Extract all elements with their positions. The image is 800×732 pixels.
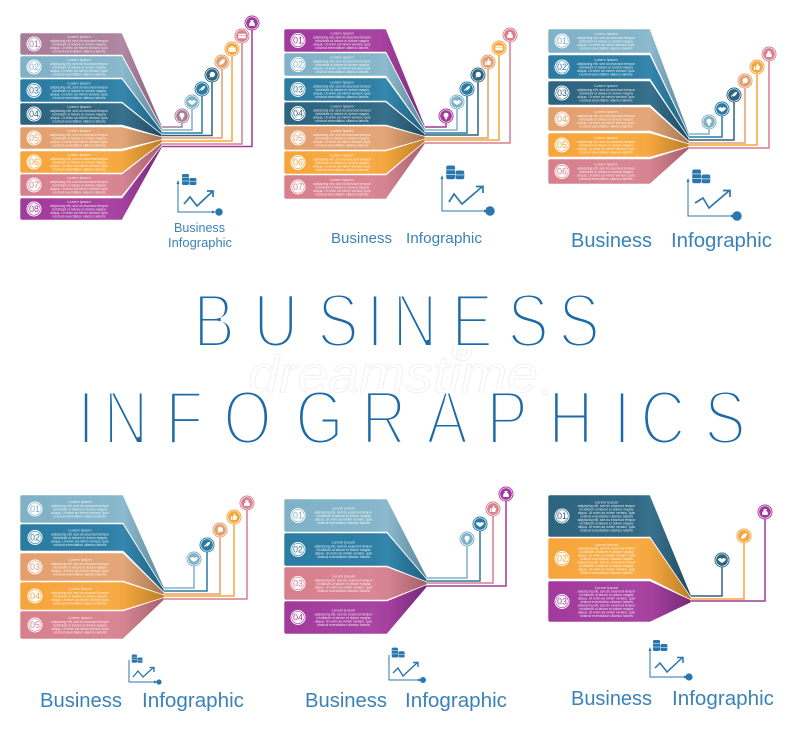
panel: infographic with 3 options	[548, 495, 774, 710]
caption: Business	[331, 230, 392, 247]
connector lines	[162, 23, 252, 146]
row 03: 03	[557, 596, 567, 606]
row 02	[20, 524, 164, 592]
row 05: incididunt ut labore et dolore magna	[52, 136, 106, 140]
row 03: adipiscing elit, sed do eiusmod tempor	[577, 88, 636, 92]
panel: infographic with 7 options	[284, 28, 518, 247]
connector lines	[689, 54, 769, 148]
row 05: aliqua. Ut enim ad minim veniam, quis	[577, 147, 635, 151]
row 04	[548, 107, 689, 144]
row 05: 05	[293, 133, 303, 143]
panel: infographic with 8 options	[20, 16, 260, 250]
row 05: nostrud exercitation ullamco laboris	[53, 630, 107, 634]
row 03: Lorem Ipsum	[594, 83, 618, 88]
row 06: aliqua. Ut enim ad minim veniam, quis	[50, 164, 108, 168]
row 05: Lorem Ipsum	[594, 135, 618, 140]
row 01: incididunt ut labore et dolore magna	[52, 42, 106, 46]
row 01: nostrud exercitation ullamco laboris	[315, 46, 369, 50]
row 01: nostrud exercitation ullamco laboris	[580, 514, 633, 518]
row 02: 02	[557, 554, 567, 564]
step icons	[714, 504, 772, 568]
row 04: adipiscing elit, sed do eiusmod tempor	[50, 109, 109, 113]
row 03: aliqua. Ut enim ad minim veniam, quis	[578, 610, 635, 614]
row 03: incididunt ut labore et dolore magna	[317, 582, 371, 586]
row 01	[20, 33, 162, 128]
row 03	[20, 79, 162, 134]
row 03: adipiscing elit, sed do eiusmod tempor	[313, 84, 372, 88]
caption: Business	[174, 220, 225, 235]
row 02: 02	[293, 60, 303, 70]
row 04: Lorem Ipsum	[330, 104, 354, 108]
chart icon	[686, 170, 742, 221]
row 01: Lorem Ipsum	[67, 34, 91, 39]
row 02: 02	[557, 62, 567, 72]
row 06: adipiscing elit, sed do eiusmod tempor	[577, 166, 636, 170]
chart icon	[440, 166, 495, 216]
row 01: nostrud exercitation ullamco laboris	[53, 514, 107, 518]
row 01: nostrud exercitation ullamco laboris	[317, 521, 370, 525]
row 04: nostrud exercitation ullamco laboris	[53, 602, 107, 606]
row 04: 04	[293, 108, 303, 118]
row 06: nostrud exercitation ullamco laboris	[579, 177, 633, 181]
row 02	[548, 538, 691, 600]
row 01: nostrud exercitation ullamco laboris	[52, 50, 106, 54]
row 03: nostrud exercitation ullamco laboris	[52, 96, 106, 100]
row 03: nostrud exercitation ullamco laboris	[315, 95, 369, 99]
row 03: 03	[293, 578, 303, 588]
row 03: aliqua. Ut enim ad minim veniam, quis	[313, 92, 371, 96]
row 01: 01	[293, 36, 303, 46]
row 01: 01	[293, 510, 303, 520]
row 02: aliqua. Ut enim ad minim veniam, quis	[50, 69, 108, 73]
row 03: nostrud exercitation ullamco laboris	[580, 600, 633, 604]
connector lines	[425, 35, 510, 143]
row 02: adipiscing elit, sed do eiusmod tempor	[578, 560, 636, 564]
row 04: aliqua. Ut enim ad minim veniam, quis	[315, 620, 372, 624]
row 05	[20, 598, 164, 639]
row 02: adipiscing elit, sed do eiusmod tempor	[50, 62, 109, 66]
row 04: adipiscing elit, sed do eiusmod tempor	[51, 591, 110, 595]
row 03: aliqua. Ut enim ad minim veniam, quis	[315, 586, 372, 590]
row 03: Lorem Ipsum	[330, 80, 354, 84]
row 01: aliqua. Ut enim ad minim veniam, quis	[51, 511, 109, 515]
row 07: incididunt ut labore et dolore magna	[315, 186, 369, 190]
caption: Business	[40, 690, 122, 712]
caption: Infographic	[168, 235, 232, 250]
row 07: 07	[29, 180, 39, 190]
row 01: nostrud exercitation ullamco laboris	[580, 528, 633, 532]
row 03: aliqua. Ut enim ad minim veniam, quis	[578, 596, 635, 600]
row 01: adipiscing elit, sed do eiusmod tempor	[577, 36, 636, 40]
row 05	[20, 127, 162, 149]
row 03: adipiscing elit, sed do eiusmod tempor	[315, 578, 373, 582]
row 05: adipiscing elit, sed do eiusmod tempor	[51, 620, 110, 624]
row 07: Lorem Ipsum	[330, 177, 354, 182]
row 02: incididunt ut labore et dolore magna	[315, 63, 369, 67]
row 02	[284, 533, 427, 582]
caption	[331, 230, 483, 247]
caption	[40, 690, 244, 712]
row 03: incididunt ut labore et dolore magna	[580, 593, 634, 597]
row 07: 07	[293, 182, 303, 192]
row 05: incididunt ut labore et dolore magna	[579, 144, 633, 148]
row 01: aliqua. Ut enim ad minim veniam, quis	[577, 43, 635, 47]
row 02: adipiscing elit, sed do eiusmod tempor	[578, 546, 636, 550]
row 04: Lorem Ipsum	[68, 586, 92, 591]
row 04: incididunt ut labore et dolore magna	[579, 118, 633, 122]
connector lines	[164, 503, 247, 599]
row 01: Lorem Ipsum	[595, 500, 619, 504]
row 06: Lorem Ipsum	[330, 152, 354, 158]
row 05: adipiscing elit, sed do eiusmod tempor	[577, 140, 636, 144]
row 03: nostrud exercitation ullamco laboris	[53, 572, 107, 576]
row 06	[548, 146, 689, 184]
row 05: Lorem Ipsum	[67, 128, 91, 133]
row 01	[20, 495, 164, 590]
row 04: incididunt ut labore et dolore magna	[53, 594, 107, 598]
row 03: incididunt ut labore et dolore magna	[52, 89, 106, 93]
row 01: aliqua. Ut enim ad minim veniam, quis	[313, 42, 371, 46]
row 03: nostrud exercitation ullamco laboris	[580, 614, 633, 618]
row 04	[284, 102, 425, 136]
row 02: Lorem Ipsum	[595, 542, 619, 547]
row 01: adipiscing elit, sed do eiusmod tempor	[51, 504, 110, 508]
row 03: adipiscing elit, sed do eiusmod tempor	[578, 590, 636, 594]
row 06: incididunt ut labore et dolore magna	[315, 161, 369, 165]
row 05: nostrud exercitation ullamco laboris	[315, 144, 369, 148]
title	[77, 278, 746, 460]
row 05: nostrud exercitation ullamco laboris	[579, 150, 633, 154]
row 07	[20, 142, 162, 196]
row 03: Lorem Ipsum	[67, 80, 91, 86]
row 01: incididunt ut labore et dolore magna	[317, 514, 371, 518]
row 02: aliqua. Ut enim ad minim veniam, quis	[577, 69, 635, 73]
row 04: adipiscing elit, sed do eiusmod tempor	[577, 114, 636, 118]
row 02: incididunt ut labore et dolore magna	[52, 66, 106, 70]
row 04: 04	[29, 109, 39, 119]
row 04: Lorem Ipsum	[594, 109, 618, 114]
row 03: 03	[30, 562, 40, 572]
row 01: incididunt ut labore et dolore magna	[315, 39, 369, 43]
row 02: Lorem Ipsum	[330, 54, 354, 60]
row 04	[20, 582, 164, 610]
row 05: 05	[29, 133, 39, 143]
watermark: dreamstime	[248, 346, 538, 404]
row 01: Lorem Ipsum	[330, 30, 354, 36]
panel: infographic with 5 options	[20, 495, 254, 712]
row 02: adipiscing elit, sed do eiusmod tempor	[51, 532, 110, 536]
caption	[571, 230, 772, 252]
row 02: incididunt ut labore et dolore magna	[317, 548, 371, 552]
chart icon	[176, 174, 223, 216]
row 02: adipiscing elit, sed do eiusmod tempor	[315, 544, 373, 548]
row 06	[20, 140, 162, 173]
row 03: aliqua. Ut enim ad minim veniam, quis	[577, 95, 635, 99]
row 06: 06	[557, 166, 567, 176]
row 01: incididunt ut labore et dolore magna	[580, 508, 634, 512]
row 03: incididunt ut labore et dolore magna	[580, 607, 634, 611]
row 06: nostrud exercitation ullamco laboris	[315, 168, 369, 172]
row 02: Lorem Ipsum	[67, 57, 91, 62]
row 04: adipiscing elit, sed do eiusmod tempor	[313, 108, 372, 112]
caption: Business	[571, 230, 652, 252]
row 02: nostrud exercitation ullamco laboris	[315, 70, 369, 74]
caption: Infographic	[142, 690, 244, 712]
row 03: nostrud exercitation ullamco laboris	[579, 98, 633, 102]
chart icon	[648, 640, 693, 681]
row 01: adipiscing elit, sed do eiusmod tempor	[578, 504, 636, 508]
row 04: aliqua. Ut enim ad minim veniam, quis	[50, 116, 108, 120]
row 03: Lorem Ipsum	[595, 585, 619, 590]
row 04: nostrud exercitation ullamco laboris	[52, 120, 106, 124]
title line: BUSINESS: BUSINESS	[193, 278, 600, 363]
row 02: nostrud exercitation ullamco laboris	[52, 72, 106, 76]
row 04: nostrud exercitation ullamco laboris	[579, 124, 633, 128]
row 05: aliqua. Ut enim ad minim veniam, quis	[51, 627, 109, 631]
row 06: 06	[293, 158, 303, 168]
row 03: adipiscing elit, sed do eiusmod tempor	[50, 86, 109, 90]
row 08: nostrud exercitation ullamco laboris	[52, 214, 106, 218]
row 01: adipiscing elit, sed do eiusmod tempor	[50, 39, 109, 43]
row 08: adipiscing elit, sed do eiusmod tempor	[50, 204, 109, 208]
row 05: adipiscing elit, sed do eiusmod tempor	[313, 133, 372, 137]
row 03: adipiscing elit, sed do eiusmod tempor	[578, 604, 636, 608]
row 04: aliqua. Ut enim ad minim veniam, quis	[313, 116, 371, 120]
row 05: incididunt ut labore et dolore magna	[315, 136, 369, 140]
row 01: adipiscing elit, sed do eiusmod tempor	[315, 510, 373, 514]
row 01: 01	[557, 511, 567, 521]
row 04: 04	[30, 591, 40, 601]
row 02: aliqua. Ut enim ad minim veniam, quis	[578, 554, 635, 558]
row 03: aliqua. Ut enim ad minim veniam, quis	[50, 92, 108, 96]
row 02: nostrud exercitation ullamco laboris	[580, 571, 633, 575]
title line: INFOGRAPHICS: INFOGRAPHICS	[77, 375, 746, 460]
row 05: nostrud exercitation ullamco laboris	[52, 144, 106, 148]
row 06: Lorem Ipsum	[594, 162, 618, 166]
caption: Business	[571, 688, 652, 710]
row 04: nostrud exercitation ullamco laboris	[315, 119, 369, 123]
row 05: adipiscing elit, sed do eiusmod tempor	[50, 133, 109, 137]
row 03	[284, 567, 427, 600]
row 01: 01	[30, 504, 40, 514]
row 07: incididunt ut labore et dolore magna	[52, 184, 106, 188]
row 05	[284, 126, 425, 150]
row 01	[548, 495, 691, 598]
row 01: adipiscing elit, sed do eiusmod tempor	[578, 518, 636, 522]
row 01: Lorem Ipsum	[594, 31, 618, 36]
row 03: 03	[557, 88, 567, 98]
row 03: 03	[29, 86, 39, 96]
row 02: adipiscing elit, sed do eiusmod tempor	[313, 60, 372, 64]
row 03	[548, 581, 691, 622]
chart icon	[389, 648, 426, 683]
row 01: 01	[29, 39, 39, 49]
row 05: incididunt ut labore et dolore magna	[53, 624, 107, 628]
row 03: adipiscing elit, sed do eiusmod tempor	[51, 562, 110, 566]
row 07	[284, 142, 425, 199]
row 04: aliqua. Ut enim ad minim veniam, quis	[51, 598, 109, 602]
row 03: nostrud exercitation ullamco laboris	[317, 589, 370, 593]
row 02: incididunt ut labore et dolore magna	[579, 66, 633, 70]
row 01: aliqua. Ut enim ad minim veniam, quis	[578, 525, 635, 529]
row 06: adipiscing elit, sed do eiusmod tempor	[313, 158, 372, 162]
row 04: incididunt ut labore et dolore magna	[317, 616, 371, 620]
row 08	[20, 146, 162, 220]
caption	[168, 220, 232, 250]
row 03: Lorem Ipsum	[68, 557, 92, 562]
row 03	[548, 81, 689, 142]
row 07: adipiscing elit, sed do eiusmod tempor	[313, 182, 372, 186]
step icons	[174, 16, 260, 124]
row 01	[284, 499, 427, 580]
row 05: aliqua. Ut enim ad minim veniam, quis	[313, 140, 371, 144]
panel: infographic with 4 options	[284, 486, 514, 712]
row 06: nostrud exercitation ullamco laboris	[52, 168, 106, 172]
row 04: Lorem Ipsum	[332, 608, 356, 612]
row 06: aliqua. Ut enim ad minim veniam, quis	[577, 174, 635, 178]
row 02	[548, 55, 689, 138]
row 04: 04	[557, 114, 567, 124]
row 01: Lorem Ipsum	[68, 499, 92, 504]
row 03: incididunt ut labore et dolore magna	[579, 92, 633, 96]
caption	[305, 690, 507, 712]
step icons	[702, 46, 776, 130]
connector lines	[691, 512, 765, 601]
row 05	[548, 133, 689, 157]
row 02: aliqua. Ut enim ad minim veniam, quis	[313, 66, 371, 70]
caption: Infographic	[671, 230, 772, 252]
row 02: incididunt ut labore et dolore magna	[53, 536, 107, 540]
row 07: nostrud exercitation ullamco laboris	[315, 192, 369, 196]
row 03: 03	[293, 84, 303, 94]
row 06: Lorem Ipsum	[67, 152, 91, 157]
row 06: 06	[29, 157, 39, 167]
row 04	[20, 103, 162, 137]
caption: Business	[305, 690, 387, 712]
row 08: incididunt ut labore et dolore magna	[52, 208, 106, 212]
row 07: Lorem Ipsum	[67, 175, 91, 180]
row 01	[548, 29, 689, 136]
row 04: incididunt ut labore et dolore magna	[52, 112, 106, 116]
row 01: nostrud exercitation ullamco laboris	[579, 46, 633, 50]
row 06: aliqua. Ut enim ad minim veniam, quis	[313, 164, 371, 168]
row 07: adipiscing elit, sed do eiusmod tempor	[50, 180, 109, 184]
row 02: nostrud exercitation ullamco laboris	[317, 555, 370, 559]
row 06	[284, 139, 425, 174]
row 03: Lorem Ipsum	[332, 574, 356, 578]
row 02: Lorem Ipsum	[594, 57, 618, 62]
row 01: incididunt ut labore et dolore magna	[580, 522, 634, 526]
row 02: incididunt ut labore et dolore magna	[580, 550, 634, 554]
row 01: adipiscing elit, sed do eiusmod tempor	[313, 36, 372, 40]
row 08: 08	[29, 204, 39, 214]
row 04: adipiscing elit, sed do eiusmod tempor	[315, 612, 373, 616]
row 03	[20, 553, 164, 595]
row 02: aliqua. Ut enim ad minim veniam, quis	[51, 540, 109, 544]
connector lines	[427, 494, 506, 586]
row 02: nostrud exercitation ullamco laboris	[579, 72, 633, 76]
chart icon	[129, 654, 162, 685]
row 02: aliqua. Ut enim ad minim veniam, quis	[578, 568, 635, 572]
row 05: 05	[30, 620, 40, 630]
row 02: nostrud exercitation ullamco laboris	[580, 557, 633, 561]
row 02: aliqua. Ut enim ad minim veniam, quis	[315, 552, 372, 556]
row 05: aliqua. Ut enim ad minim veniam, quis	[50, 140, 108, 144]
row 04: Lorem Ipsum	[67, 104, 91, 109]
caption: Infographic	[405, 690, 507, 712]
step icons	[186, 496, 254, 566]
row 07: aliqua. Ut enim ad minim veniam, quis	[313, 189, 371, 193]
row 03: incididunt ut labore et dolore magna	[315, 88, 369, 92]
row 01	[284, 29, 425, 128]
row 04: nostrud exercitation ullamco laboris	[317, 623, 370, 627]
row 04: aliqua. Ut enim ad minim veniam, quis	[577, 121, 635, 125]
row 02: 02	[29, 62, 39, 72]
row 01: aliqua. Ut enim ad minim veniam, quis	[578, 511, 635, 515]
row 01: aliqua. Ut enim ad minim veniam, quis	[50, 46, 108, 50]
row 02	[20, 56, 162, 132]
row 05: 05	[557, 140, 567, 150]
row 02	[284, 53, 425, 132]
row 03	[284, 78, 425, 134]
row 01: incididunt ut labore et dolore magna	[579, 40, 633, 44]
row 05: Lorem Ipsum	[330, 128, 354, 133]
row 01: aliqua. Ut enim ad minim veniam, quis	[315, 518, 372, 522]
caption	[571, 688, 774, 710]
row 08: Lorem Ipsum	[67, 199, 91, 204]
row 02: adipiscing elit, sed do eiusmod tempor	[577, 62, 636, 66]
row 01: incididunt ut labore et dolore magna	[53, 508, 107, 512]
row 01: 01	[557, 36, 567, 46]
caption: Infographic	[672, 688, 774, 710]
panel: infographic with 6 options	[548, 29, 776, 252]
row 02: incididunt ut labore et dolore magna	[580, 564, 634, 568]
row 02: 02	[30, 532, 40, 542]
row 02: 02	[293, 544, 303, 554]
row 06: incididunt ut labore et dolore magna	[579, 170, 633, 174]
row 06: incididunt ut labore et dolore magna	[52, 160, 106, 164]
row 03: incididunt ut labore et dolore magna	[53, 566, 107, 570]
row 04	[284, 584, 427, 634]
row 03: aliqua. Ut enim ad minim veniam, quis	[51, 569, 109, 573]
step icons	[438, 28, 518, 124]
row 04: 04	[293, 612, 303, 622]
row 07: aliqua. Ut enim ad minim veniam, quis	[50, 187, 108, 191]
row 04: incididunt ut labore et dolore magna	[315, 112, 369, 116]
row 08: aliqua. Ut enim ad minim veniam, quis	[50, 211, 108, 215]
row 01: Lorem Ipsum	[332, 506, 356, 510]
caption: Infographic	[406, 230, 483, 247]
row 05: Lorem Ipsum	[68, 615, 92, 620]
row 07: nostrud exercitation ullamco laboris	[52, 190, 106, 194]
row 02: nostrud exercitation ullamco laboris	[53, 543, 107, 547]
step icons	[460, 486, 514, 546]
row 02: Lorem Ipsum	[68, 528, 92, 532]
row 06: adipiscing elit, sed do eiusmod tempor	[50, 157, 109, 161]
row 02: Lorem Ipsum	[332, 540, 356, 544]
